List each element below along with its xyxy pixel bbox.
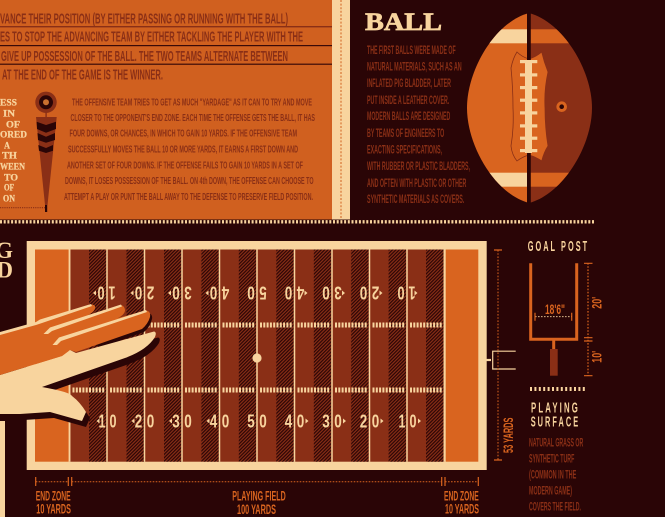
yard numbers: bottom row: 0 [110, 410, 116, 432]
yard numbers: bottom row: 0 [259, 410, 267, 432]
slab serif text: cropped column: ESS [0, 98, 17, 108]
intro text block: VANCE THEIR POSITION (BY EITHER PASSING OR RUNNING WITH THE BALL) [0, 10, 288, 28]
downs paragraph: FOUR DOWNS, OR CHANCES, IN WHICH TO GAIN 10 YARDS. IF THE OFFENSIVE TEAM [70, 128, 297, 140]
text: SYNTHETIC MATERIALS AS COVERS. [367, 194, 464, 206]
yard numbers: bottom row: 0 [334, 410, 342, 432]
yard numbers: top row (upside down): 5 [259, 282, 267, 304]
yard numbers: bottom row: 0 [147, 410, 154, 432]
yard numbers: bottom row: 4 [285, 410, 293, 432]
orange fingers [0, 304, 150, 375]
hatched field stripes [89, 250, 443, 462]
heading: playing surface: SURFACE [531, 415, 580, 431]
yard numbers: top row (upside down): 4 [296, 282, 304, 304]
yard numbers: bottom row: 2 [360, 410, 367, 432]
hash marks [72, 325, 442, 390]
downs paragraph: THE OFFENSIVE TEAM TRIES TO GET AS MUCH "YARDAGE" AS IT CAN TO TRY AND MOVE [72, 96, 312, 108]
yard numbers: top row (upside down): 1 [408, 282, 416, 304]
text block: playing surface: (COMMON IN THE [529, 470, 576, 482]
text block: playing surface: MODERN GAME) [529, 486, 572, 498]
fold strip divider [332, 0, 350, 220]
label: right end zone: 10 YARDS [445, 502, 479, 517]
laces [520, 60, 537, 153]
text block: ball history: NATURAL MATERIALS, SUCH AS AN [367, 61, 462, 73]
label: right end zone: END ZONE [444, 489, 479, 504]
dotted divider row [0, 220, 594, 224]
text block: ball history: THE FIRST BALLS WERE MADE OF [367, 45, 456, 57]
panel: football field [27, 241, 487, 470]
dotted divider short [530, 387, 587, 391]
text: WITH RUBBER OR PLASTIC BLADDERS, [367, 161, 470, 173]
slab serif text: cropped column: OF [4, 182, 14, 192]
yard numbers: bottom row: 0 [410, 410, 416, 432]
yard numbers: bottom row: 0 [222, 410, 229, 432]
label: playing field: 100 YARDS [237, 502, 276, 517]
height dimension [587, 263, 589, 376]
intro text block [0, 10, 332, 84]
yard numbers: bottom row [96, 410, 421, 432]
dimension: 53 yards: 53 YARDS [501, 418, 516, 453]
heading: ball: BALL [365, 7, 442, 36]
heading: goal post: GOAL POST [528, 239, 589, 255]
icon: hand over field [0, 304, 160, 427]
text block: ball history: MODERN BALLS ARE DESIGNED [367, 111, 450, 123]
yard numbers: top row (upside down): 2 [372, 282, 379, 304]
yard lines [70, 250, 444, 462]
label: left end zone: 10 YARDS [36, 502, 71, 517]
slab serif text: cropped column: WEEN [0, 162, 25, 172]
downs paragraph: DOWNS, IT LOSES POSSESSION OF THE BALL. ON 4th DOWN, THE OFFENSE CAN CHOOSE TO [65, 175, 314, 187]
text: NATURAL GRASS OR [529, 438, 584, 450]
icon: football [467, 14, 592, 202]
yard numbers: bottom row: 1 [98, 410, 106, 432]
yard numbers: top row (upside down): 0 [398, 282, 404, 304]
text block: ball history: BY TEAMS OF ENGINEERS TO [367, 128, 444, 140]
label: left end zone [36, 489, 71, 517]
yard numbers: top row (upside down): 4 [221, 282, 229, 304]
heading: playing surface [531, 401, 580, 431]
yard numbers: bottom row: 0 [184, 410, 192, 432]
downs paragraph [64, 96, 315, 203]
text block: playing surface [529, 438, 584, 514]
icon: down marker [0, 92, 57, 212]
heading: playing surface: PLAYING [531, 401, 580, 417]
yard numbers: bottom row: 4 [210, 410, 218, 432]
yard numbers: top row (upside down) [93, 282, 418, 304]
yard numbers: top row (upside down): 1 [108, 282, 116, 304]
heading: cropped playing field title [0, 238, 13, 283]
text block: ball history: EXACTING SPECIFICATIONS, [367, 144, 442, 156]
slab serif text: cropped column: TH [2, 150, 17, 160]
slab serif text: cropped column [0, 98, 28, 204]
yard numbers: bottom row: 2 [135, 410, 142, 432]
dimension: 53 yards [494, 250, 516, 460]
width dimension [535, 316, 572, 318]
yard numbers: bottom row: 3 [172, 410, 180, 432]
hand shadow [4, 313, 160, 427]
yard numbers: top row (upside down): 3 [184, 282, 192, 304]
diagram: goal post [531, 263, 604, 376]
width label: 18'6" [545, 302, 565, 317]
lower left cream strip [0, 421, 5, 517]
downs paragraph: SUCCESSFULLY MOVES THE BALL 10 OR MORE YARDS, IT EARNS A FIRST DOWN AND [68, 144, 298, 156]
yard numbers: top row (upside down): 0 [360, 282, 367, 304]
downs paragraph: ATTEMPT A PLAY OR PUNT THE BALL AWAY TO THE DEFENSE TO PRESERVE FIELD POSITION. [64, 191, 313, 203]
text block: ball history: INFLATED PIG BLADDER, LATER [367, 78, 451, 90]
yard numbers: top row (upside down): 0 [98, 282, 104, 304]
label: right end zone [444, 489, 479, 517]
downs paragraph: CLOSER TO THE OPPONENT'S END ZONE. EACH TIME THE OFFENSE GETS THE BALL, IT HAS [70, 112, 315, 124]
text block: playing surface: SYNTHETIC TURF [529, 454, 574, 466]
slab serif text: cropped column: ORED [0, 130, 28, 140]
slab serif text: cropped column: OF [6, 120, 21, 130]
mini goal post on field edge [482, 351, 516, 369]
intro text block: AT THE END OF THE GAME IS THE WINNER. [2, 66, 163, 84]
yard numbers: top row (upside down): 0 [322, 282, 330, 304]
finger highlights [0, 304, 147, 345]
intro text block: GIVE UP POSSESSION OF THE BALL. THE TWO TEAMS ALTERNATE BETWEEN [1, 48, 288, 65]
yard numbers: top row (upside down): 0 [172, 282, 180, 304]
label: playing field [232, 489, 286, 517]
label: left end zone: END ZONE [36, 489, 71, 504]
yard numbers: top row (upside down): 2 [147, 282, 154, 304]
intro text block: ES TO STOP THE ADVANCING TEAM BY EITHER TACKLING THE PLAYER WITH THE [0, 28, 303, 46]
label: playing field: PLAYING FIELD [232, 489, 286, 504]
yard numbers: bottom row: 5 [247, 410, 255, 432]
text: AND OFTEN WITH PLASTIC OR OTHER [367, 178, 467, 190]
yard numbers: top row (upside down): 0 [135, 282, 142, 304]
yard numbers: bottom row: 3 [322, 410, 330, 432]
yard numbers: top row (upside down): 0 [247, 282, 255, 304]
yard numbers: bottom row: 0 [372, 410, 379, 432]
diagram: goal post: 10' [590, 351, 604, 363]
slab serif text: cropped column: TO [4, 172, 18, 182]
yard numbers: bottom row: 0 [297, 410, 304, 432]
yard numbers: top row (upside down): 3 [334, 282, 342, 304]
yard numbers: bottom row: 1 [398, 410, 406, 432]
diagram: goal post: 20' [590, 297, 604, 309]
slab serif text: cropped column: IN [3, 108, 16, 118]
yard numbers: top row (upside down): 0 [285, 282, 292, 304]
center spot [252, 353, 262, 363]
dimension: field lengths [36, 477, 478, 486]
slab serif text: cropped column: ON [3, 194, 15, 204]
downs paragraph: ANOTHER SET OF FOUR DOWNS. IF THE OFFENSE FAILS TO GAIN 10 YARDS IN A SET OF [67, 160, 303, 172]
panel: how the game is played [0, 0, 332, 220]
slab serif text: cropped column: A [4, 140, 10, 150]
text block: ball history: PUT INSIDE A LEATHER COVER. [367, 95, 449, 107]
cream thumb and palm [0, 332, 156, 421]
text: COVERS THE FIELD. [529, 502, 581, 514]
yard numbers: top row (upside down): 0 [210, 282, 217, 304]
text block: ball history [367, 45, 470, 206]
